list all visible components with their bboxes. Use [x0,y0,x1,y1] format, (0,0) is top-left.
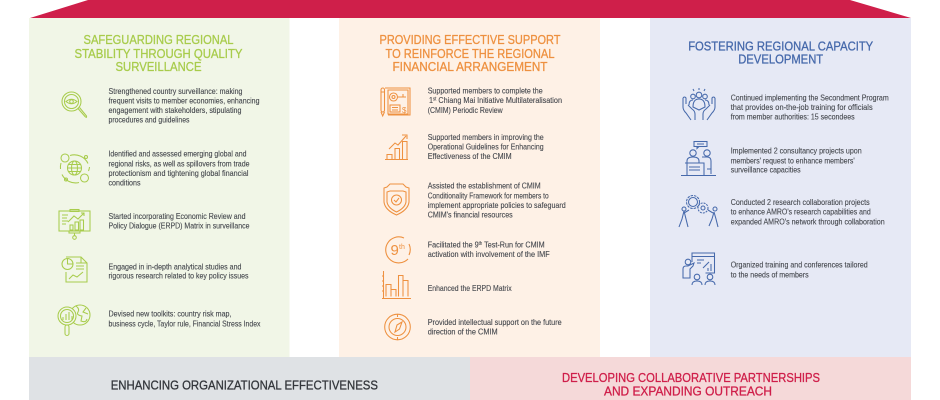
icon: rising bars with arrow [385,135,408,160]
heading: safeguarding: STABILITY THROUGH QUALITY [74,46,243,61]
icon: shield with check [384,184,409,215]
icon: ninth badge: th [399,244,405,251]
text: analytical studies: rigorous research related to key policy issues [108,271,248,281]
icon: magnifier over globe [58,305,90,336]
text: global and regional risks: protectionism and tightening global financial [108,168,249,178]
heading: collaborative partnerships [562,370,820,399]
icon: report with pie chart [62,257,87,282]
icon: ninth badge: 9 [390,242,399,259]
heading: collaborative partnerships: DEVELOPING COLLABORATIVE PARTNERSHIPS [562,370,820,385]
text: analytical studies: Engaged in in-depth analytical studies and [108,261,242,271]
text: test-run: Test-Run for CMIM [482,240,545,250]
text: training and conferences [731,260,868,279]
text: country surveillance: engagement with stakeholders, stipulating [108,105,242,115]
text: new toolkits: Devised new toolkits: country risk map, [108,309,232,319]
text: operational guidelines: Operational Guidelines for Enhancing [428,142,544,152]
heading: safeguarding: SURVEILLANCE [116,59,202,74]
heading: providing effective support: TO REINFORCE THE REGIONAL [386,46,554,61]
text: ERPD matrix in surveillance: Policy Dialogue (ERPD) Matrix in surveillance [108,220,250,230]
text: new toolkits: business cycle, Taylor rule, Financial Stress Index [108,318,261,328]
text: global and regional risks: Identified and assessed emerging global and [108,149,247,159]
text: country surveillance [108,86,260,125]
text: ERPD matrix in surveillance: Started incorporating Economic Review and [108,211,246,221]
text: conditionality framework: Conditionality Framework for members to [428,190,549,200]
text: research collaboration: Conducted 2 research collaboration projects [731,197,870,207]
panel: collaborative partnerships [470,357,911,400]
text: consultancy projects: surveillance capacities [731,165,801,175]
text: secondment program [731,92,889,121]
heading: fostering capacity: FOSTERING REGIONAL CAPACITY [688,38,874,54]
text: research collaboration [731,197,885,226]
icon: documents with pencil: $ [402,106,407,115]
text: consultancy projects: Implemented 2 consultancy projects upon [731,146,862,156]
text: secondment program: from member authorities: 15 secondees [731,111,855,121]
text: periodic review: Supported members to complete the [428,86,543,96]
heading: collaborative partnerships: AND EXPANDING OUTREACH [604,384,772,399]
text: global and regional risks [108,149,250,187]
heading: providing effective support: PROVIDING EFFECTIVE SUPPORT [380,32,561,47]
text: periodic review: (CMIM) Periodic Review [428,105,503,115]
text: enhanced ERPD: Enhanced the ERPD Matrix [428,283,512,293]
text: country surveillance: Strengthened country surveillance: making [108,86,243,96]
text: consultancy projects [731,146,862,175]
text: global and regional risks: conditions [108,177,140,187]
text: operational guidelines: Effectiveness of the CMIM [428,151,512,161]
icon: ninth badge [386,237,410,263]
panel: capacity development [650,18,911,357]
text: periodic review: Chiang Mai Initiative Multilateralisation [436,95,562,105]
icon: globe with dollar coins [60,154,90,183]
icon: consultants at desk [681,142,716,176]
text: conditionality framework: implement appropriate policies to safeguard [428,200,566,210]
text: periodic review: st [433,96,437,102]
icon: compass [385,314,410,340]
text: test-run: activation with involvement of the IMF [428,249,550,259]
icon: bar chart [382,271,411,299]
panel: regional financial arrangement [339,18,600,357]
text: global and regional risks: regional risks, as well as spillovers from trade [108,158,250,168]
text: country surveillance: procedures and guidelines [108,115,190,125]
text: periodic review [428,86,562,115]
text: test-run [428,240,550,259]
icon: presenter and audience [683,253,715,285]
text: conditionality framework [428,181,566,220]
panel: safeguarding regional stability [29,18,290,357]
text: periodic review: 1 [429,95,434,105]
heading: safeguarding [74,32,243,74]
icon: hands holding people [683,88,715,120]
icon: magnifier with eye [62,92,87,117]
text: analytical studies [108,261,248,281]
heading: safeguarding: SAFEGUARDING REGIONAL [84,32,234,47]
text: operational guidelines [428,132,544,161]
text: secondment program: Continued implementing the Secondment Program [731,92,889,102]
heading: providing effective support: FINANCIAL ARRANGEMENT [392,59,548,74]
text: conditionality framework: CMIM's financial resources [428,210,513,220]
text: future direction [428,317,562,337]
panel: organizational effectiveness [29,357,470,400]
icon: presentation board [59,210,90,239]
icon: people moving gears [679,196,718,227]
text: research collaboration: expanded AMRO's network through collaboration [731,216,885,226]
text: training and conferences: Organized training and conferences tailored [731,260,868,270]
text: secondment program: that provides on-the-job training for officials [731,102,873,112]
text: operational guidelines: Supported members in improving the [428,132,544,142]
text: test-run: Facilitated the 9 [428,240,488,250]
text: country surveillance: frequent visits to member economies, enhancing [108,96,260,106]
text: ERPD matrix in surveillance [108,211,250,230]
heading: organizational effectiveness: ENHANCING ORGANIZATIONAL EFFECTIVENESS [111,377,378,392]
heading: fostering capacity [688,38,874,67]
text: research collaboration: to enhance AMRO's research capabilities and [731,207,871,217]
heading: providing effective support [380,32,561,74]
text: conditionality framework: Assisted the establishment of CMIM [428,181,541,191]
roof banner [30,0,911,18]
text: new toolkits [108,309,261,328]
text: future direction: direction of the CMIM [428,327,498,337]
text: test-run: th [479,241,482,247]
text: training and conferences: to the needs of members [731,269,809,279]
icon: documents with pencil [381,88,410,116]
heading: fostering capacity: DEVELOPMENT [738,52,823,67]
text: consultancy projects: members' request to enhance members' [731,155,855,165]
text: future direction: Provided intellectual support on the future [428,317,562,327]
